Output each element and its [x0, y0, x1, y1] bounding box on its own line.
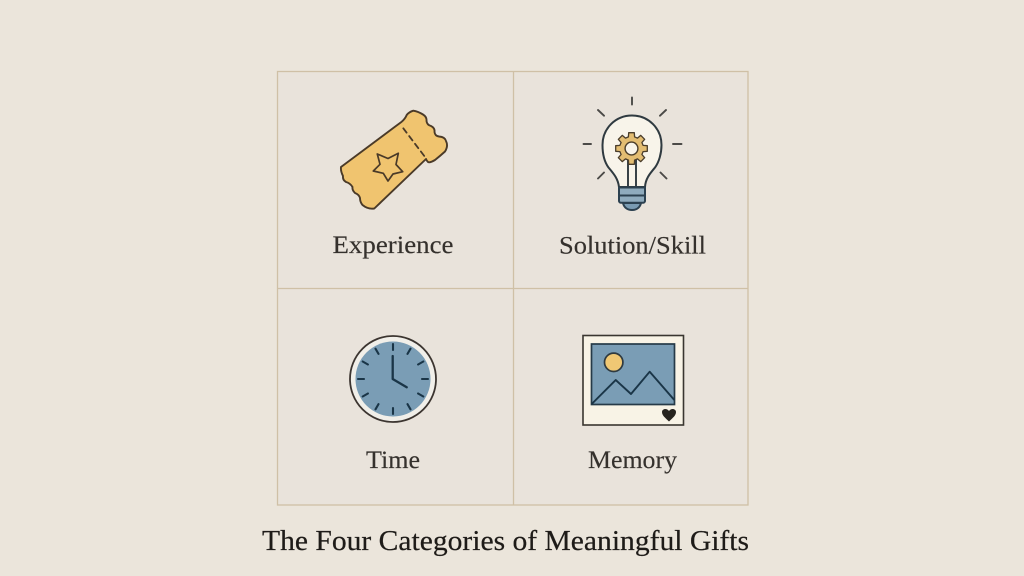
- panel: four-category grid: [278, 72, 748, 505]
- icon: ticket with star: [341, 111, 447, 209]
- icon: lightbulb with gear: [584, 98, 682, 210]
- label: solution/skill: Solution/Skill: [559, 230, 706, 260]
- label: experience: Experience: [332, 230, 454, 259]
- label: memory: Memory: [588, 445, 677, 474]
- panel: memory: [583, 336, 684, 474]
- panel: solution/skill: [559, 98, 706, 260]
- label: time: Time: [366, 445, 420, 474]
- title: The Four Categories of Meaningful Gifts: [262, 526, 749, 557]
- icon detail: gear: [616, 133, 647, 164]
- panel: experience: [332, 111, 454, 259]
- panel: time: [350, 336, 436, 474]
- icon: wall clock at four o'clock: [350, 336, 436, 422]
- icon: instant photo with mountains and heart: [583, 336, 684, 425]
